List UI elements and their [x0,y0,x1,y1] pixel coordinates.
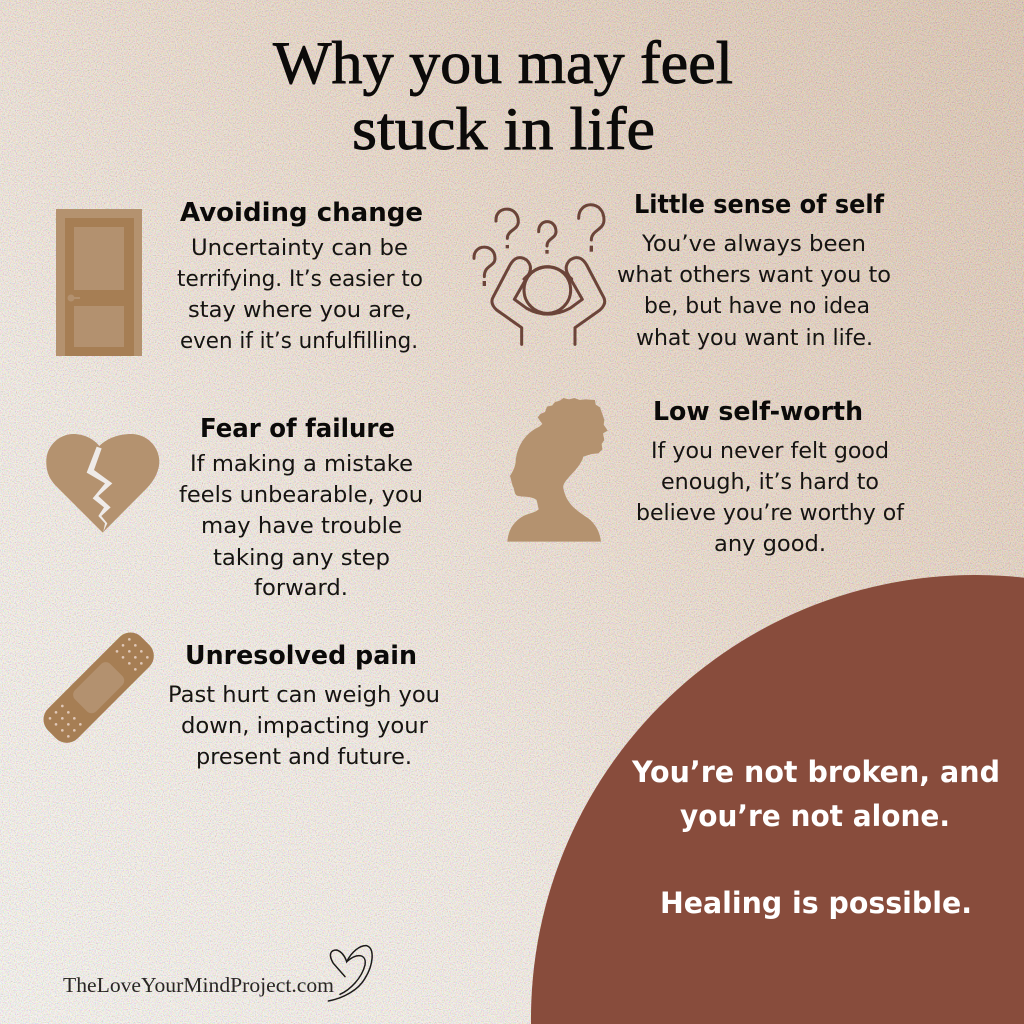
text: unresolved pain [168,683,440,770]
text: unresolved pain: down, impacting your [181,714,429,739]
title [273,30,733,162]
text: avoiding change: even if it’s unfulfilling. [180,329,418,354]
text: avoiding change: terrifying. It’s easier to [177,267,423,292]
icon: door [56,209,142,356]
text: little sense of self [617,232,891,351]
callout background shape [531,575,1024,1024]
title: Why you may feel [273,30,733,96]
text: fear of failure: feels unbearable, you [179,483,423,508]
website name: TheLoveYourMindProject.com [63,973,334,997]
heading: unresolved pain: Unresolved pain [185,641,417,671]
text: low self-worth: any good. [714,532,826,557]
text: avoiding change [177,236,423,354]
panel: little sense of self [474,190,891,351]
text: low self-worth: If you never felt good [651,439,889,464]
footer logo [63,946,372,1001]
text: fear of failure [179,452,423,601]
text: unresolved pain: Past hurt can weigh you [168,683,440,708]
panel: low self-worth [507,397,905,557]
heading: little sense of self: Little sense of self [634,190,885,220]
text: low self-worth: believe you’re worthy of [636,501,905,526]
callout panel [531,575,1024,1024]
icon: head with question marks [474,205,605,344]
title: stuck in life [352,96,655,162]
text: low self-worth: enough, it’s hard to [661,470,879,495]
callout text: You’re not broken, and [631,755,1000,789]
icon: logo heart [328,946,372,1001]
text: little sense of self: You’ve always been [641,232,866,257]
text: fear of failure: taking any step [213,546,390,571]
heading: fear of failure: Fear of failure [200,414,395,444]
callout text [631,755,1000,920]
heading: avoiding change: Avoiding change [180,198,423,228]
text: little sense of self: be, but have no idea [644,294,870,319]
text: unresolved pain: present and future. [196,745,412,770]
text: low self-worth [636,439,905,557]
callout text: you’re not alone. [680,799,950,833]
text: little sense of self: what you want in life. [636,326,873,351]
icon: woman silhouette [507,398,608,542]
panel: fear of failure [46,414,423,601]
text: little sense of self: what others want you to [617,263,891,288]
callout text: Healing is possible. [660,886,972,920]
heading: low self-worth: Low self-worth [653,397,863,427]
text: fear of failure: If making a mistake [190,452,413,477]
panel: unresolved pain [37,626,440,770]
text: fear of failure: forward. [254,576,348,601]
text: avoiding change: Uncertainty can be [191,236,408,261]
text: fear of failure: may have trouble [201,514,402,539]
panel: avoiding change [56,198,423,356]
icon: broken heart [46,434,159,533]
icon: bandage [37,626,160,749]
text: avoiding change: stay where you are, [188,298,412,323]
